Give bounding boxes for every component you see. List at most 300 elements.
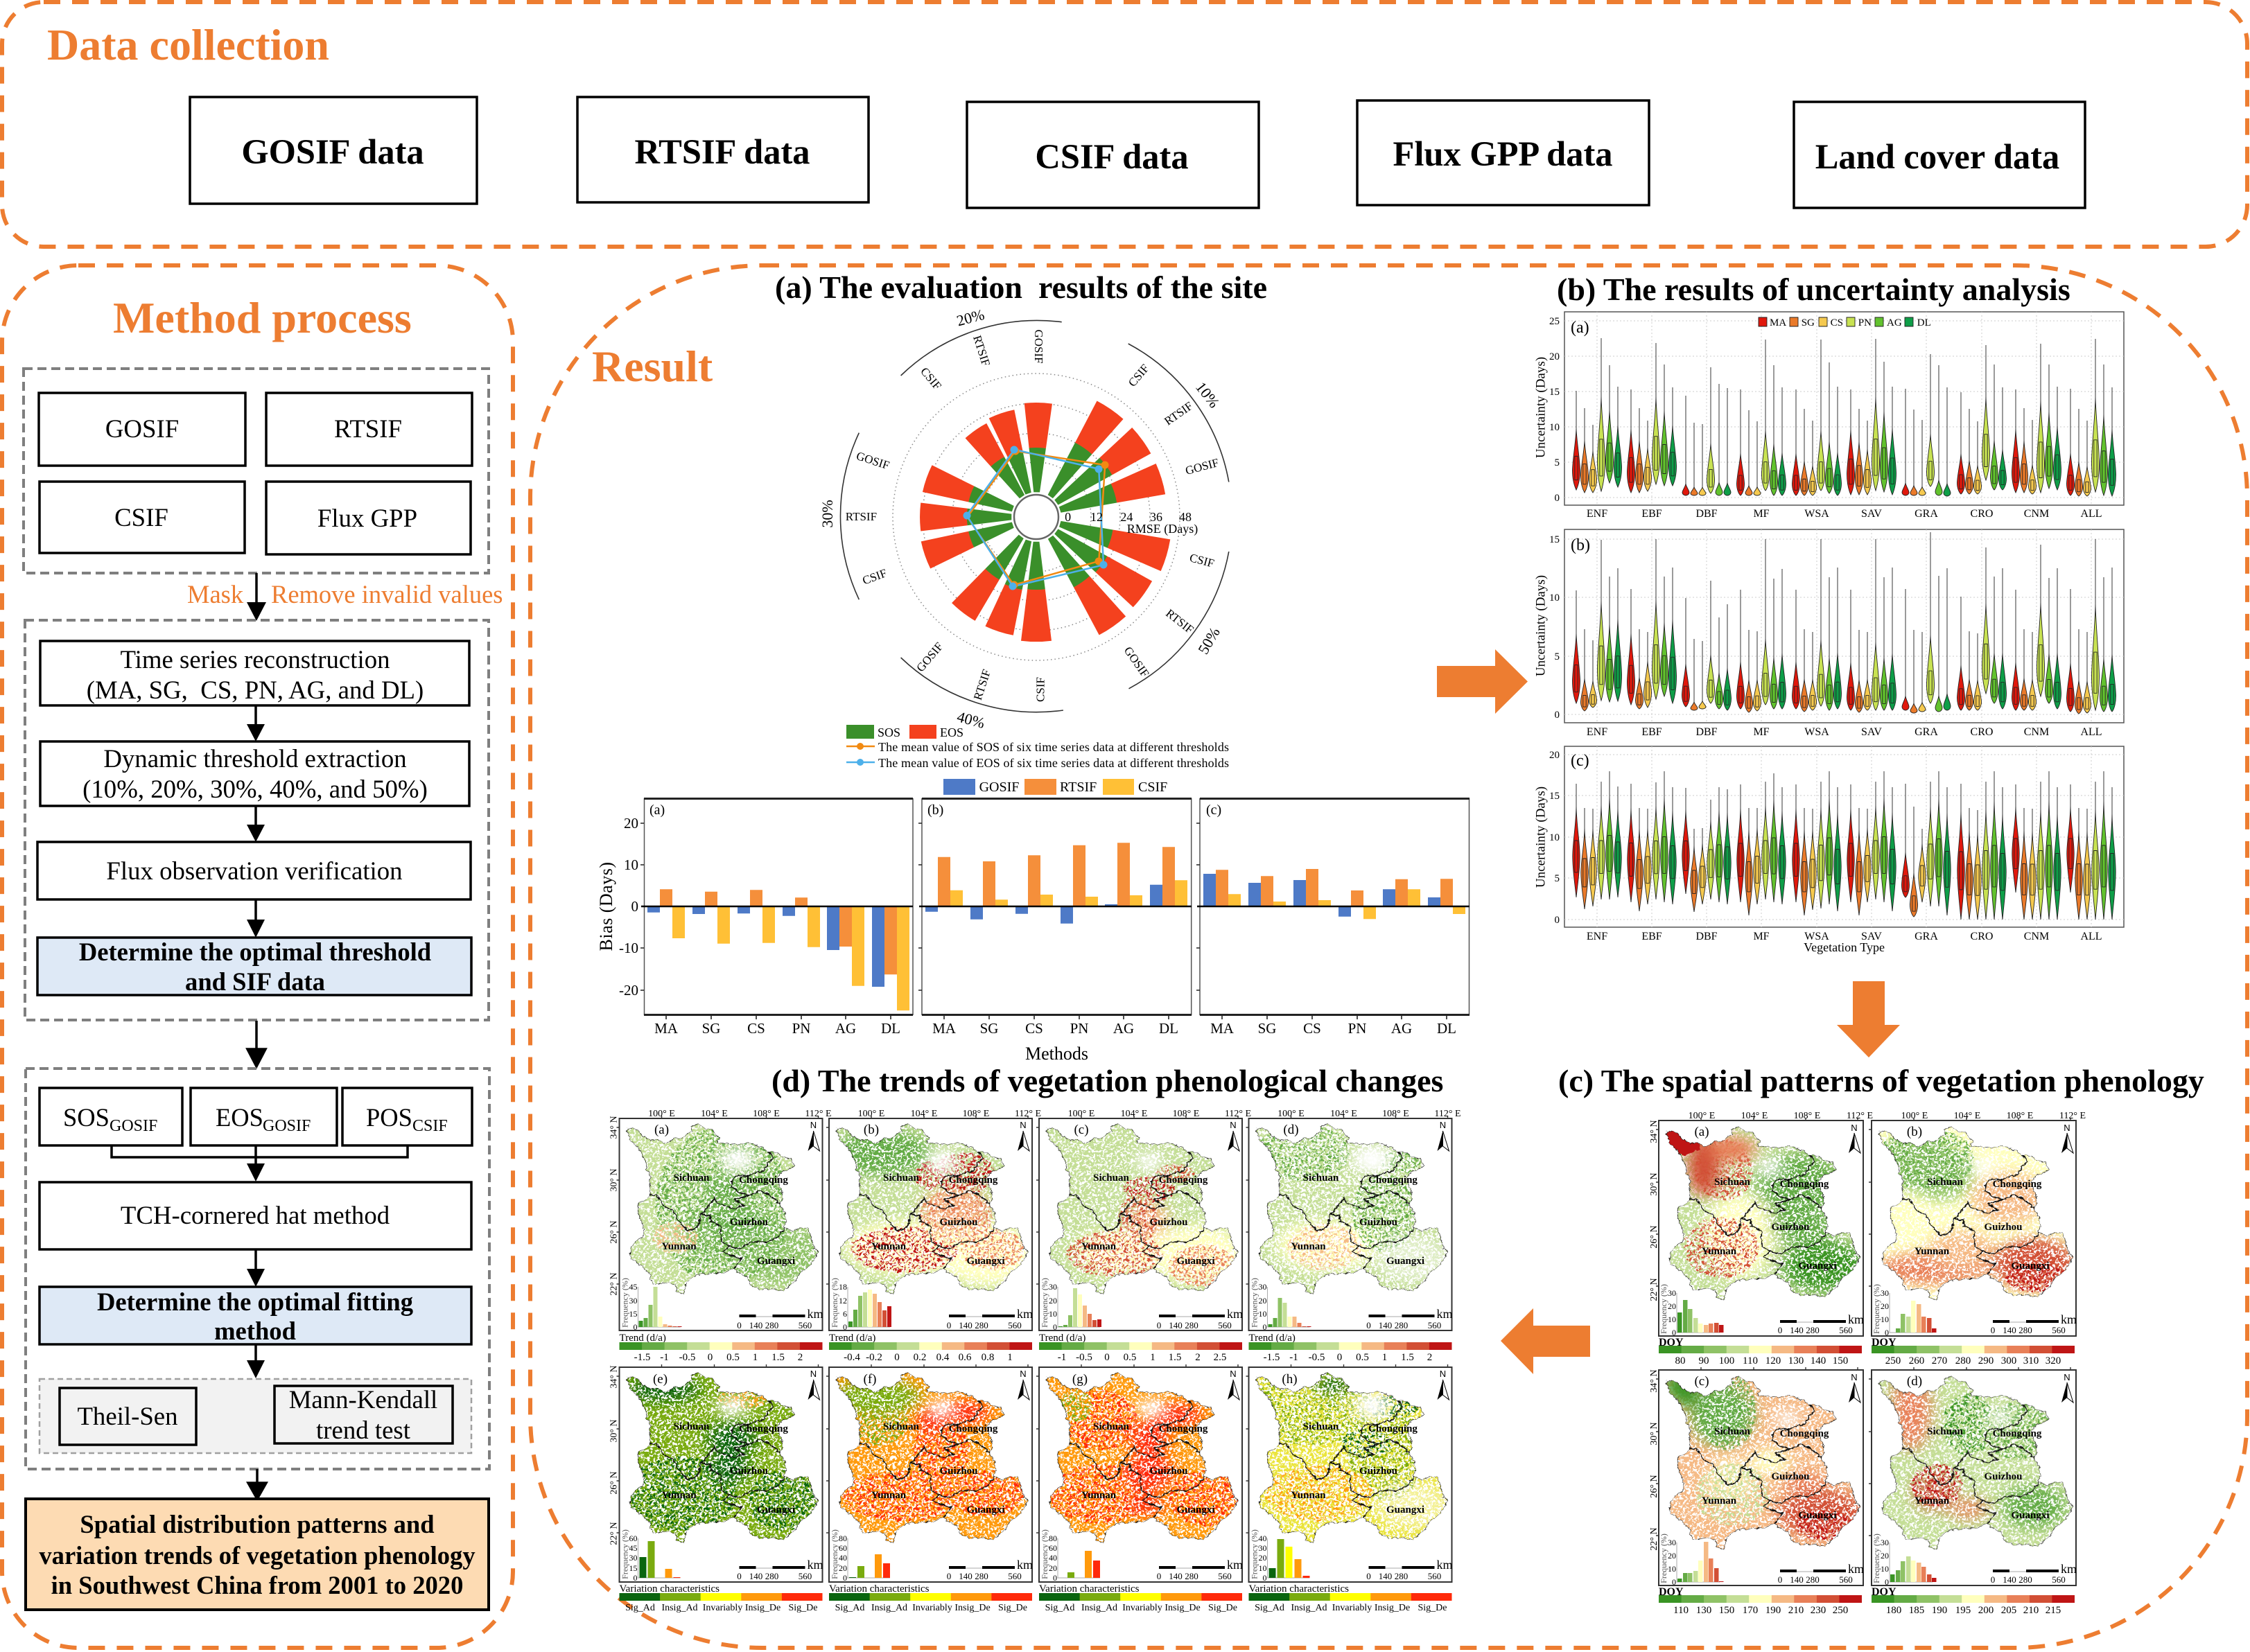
map panel: spatial EOS (b): 280 — [1955, 1355, 1971, 1367]
chart: polar RMSE: 12 — [1090, 510, 1103, 524]
map panel: spatial EOS (b): 300 — [2001, 1355, 2016, 1367]
map panel: trend (d): 30 — [1259, 1282, 1267, 1292]
map panel: trend (c): 140 — [1169, 1320, 1183, 1330]
map panel: trend (a): 0 — [708, 1352, 713, 1363]
map panel: variation (h): 10 — [1259, 1563, 1267, 1573]
map panel: spatial EOS (b): 108° E — [2007, 1111, 2033, 1121]
heading: spatial patterns: (c) The spatial patterns of vegetation phenology — [1558, 1063, 2204, 1098]
group: fitting steps: trend test — [316, 1416, 410, 1444]
map panel: trend (a): 112° E — [805, 1109, 832, 1119]
map panel: variation (g): (g) — [1072, 1372, 1088, 1387]
map panel: trend (a): 30 — [629, 1296, 638, 1306]
map panel: trend (d): 0 — [1337, 1352, 1342, 1363]
map panel: variation (e): 60 — [629, 1534, 638, 1543]
map panel: spatial SOS (a) — [1649, 1111, 1873, 1367]
bar chart: bias: DL — [1437, 1020, 1456, 1037]
map panel: variation (h): Sig_De — [1418, 1603, 1447, 1613]
map panel: trend (c): 560 — [1218, 1320, 1232, 1330]
map panel: spatial SOS (a): km — [1848, 1312, 1864, 1326]
map panel: variation (h): Guizhou — [1359, 1466, 1397, 1477]
map panel: variation (g): Invariably — [1122, 1603, 1162, 1613]
map panel: trend (d): 140 — [1379, 1320, 1392, 1330]
map panel: variation (f): Frequency (%) — [830, 1529, 839, 1579]
group: fitting steps — [26, 1069, 489, 1469]
map panel: spatial EOS (b): 270 — [1932, 1355, 1947, 1367]
map panel: variation (g): Chongqing — [1159, 1423, 1208, 1434]
map panel: spatial SOS (a): 34° N — [1649, 1120, 1659, 1143]
bar chart: bias: CS — [747, 1020, 765, 1037]
map panel: trend (a): 560 — [799, 1320, 812, 1330]
map panel: trend (c): km — [1227, 1307, 1243, 1321]
chart: uncertainty violin (c): 0 — [1554, 915, 1560, 926]
map panel: variation (f): 20 — [839, 1563, 847, 1573]
map panel: variation (f): Chongqing — [949, 1423, 998, 1434]
map panel: trend (a): 30° N — [609, 1168, 619, 1192]
map panel: spatial SOS (a): Guizhou — [1771, 1222, 1810, 1233]
map panel: spatial length (d): 180 — [1886, 1605, 1901, 1616]
arrow: left to trends — [1501, 1308, 1590, 1374]
chart: uncertainty violin (a): EBF — [1641, 508, 1662, 520]
map panel: trend (a): 1 — [753, 1352, 758, 1363]
map panel: spatial POS (c): Guangxi — [1798, 1510, 1837, 1521]
map panel: trend (b): 280 — [975, 1320, 988, 1330]
map panel: variation (f): Insig_Ad — [871, 1603, 907, 1613]
map panel: variation (e): Sichuan — [674, 1421, 710, 1432]
chart: polar RMSE: 30% — [819, 500, 836, 528]
chart: uncertainty violin (b): ENF — [1587, 726, 1607, 738]
map panel: variation (f): Insig_De — [954, 1603, 991, 1613]
legend: violin methods: DL — [1917, 317, 1931, 328]
map panel: spatial POS (c): 22° N — [1649, 1527, 1659, 1551]
box: final output: variation trends of vegetation phenology — [39, 1541, 476, 1570]
map panel: variation (h): 30 — [1259, 1543, 1267, 1553]
map panel: variation (g): km — [1227, 1558, 1243, 1572]
map panel: trend (b): Guizhou — [939, 1217, 978, 1228]
map panel: trend (b): 0 — [894, 1352, 900, 1363]
map panel: spatial POS (c): 130 — [1696, 1605, 1711, 1616]
chart: uncertainty violin (a): 20 — [1549, 351, 1560, 362]
group: threshold steps: Time series reconstruction — [120, 645, 390, 674]
map panel: trend (d): Guizhou — [1359, 1217, 1397, 1228]
map panel: trend (a) — [609, 1109, 832, 1363]
chart: uncertainty violin (a): WSA — [1804, 508, 1829, 520]
chart: polar RMSE: CSIF — [1034, 677, 1047, 702]
chart: uncertainty violin (c): EBF — [1641, 931, 1662, 942]
chart: polar RMSE: 0 — [1065, 510, 1071, 524]
map panel: trend (d): 1 — [1382, 1352, 1387, 1363]
map panel: variation (h): 0 — [1366, 1571, 1371, 1581]
map panel: trend (b): Frequency (%) — [830, 1278, 839, 1328]
map panel: spatial EOS (b): Sichuan — [1927, 1177, 1964, 1188]
map panel: variation (g) — [1036, 1364, 1243, 1613]
chart: uncertainty violin (a): CRO — [1971, 508, 1993, 520]
map panel: spatial SOS (a): 112° E — [1847, 1111, 1873, 1121]
chart: uncertainty violin (b) — [1533, 529, 2124, 738]
group: threshold steps: (MA, SG, CS, PN, AG, and DL) — [87, 676, 424, 704]
chart: uncertainty violin (b): MF — [1753, 726, 1770, 738]
group: fitting steps: Theil-Sen — [77, 1402, 178, 1430]
legend: polar chart: SOS — [878, 726, 900, 739]
chart: uncertainty violin (c): Uncertainty (Days) — [1533, 787, 1548, 888]
map panel: spatial SOS (a): Frequency (%) — [1659, 1284, 1668, 1334]
map panel: spatial SOS (a): 100 — [1719, 1355, 1734, 1367]
chart: polar RMSE: GOSIF — [1122, 644, 1152, 680]
map panel: trend (d): -1 — [1289, 1352, 1298, 1363]
map panel: spatial POS (c): DOY — [1659, 1586, 1684, 1598]
legend: polar chart: The mean value of EOS of six time series data at different thresholds — [878, 756, 1229, 770]
chart: uncertainty violin (b): ALL — [2080, 726, 2102, 738]
map panel: trend (a): 100° E — [648, 1109, 675, 1119]
map panel: spatial EOS (b): 112° E — [2059, 1111, 2086, 1121]
map panel: variation (h): Sichuan — [1303, 1421, 1339, 1432]
chart: uncertainty violin (b): Uncertainty (Days) — [1533, 575, 1548, 676]
map panel: variation (f): Yunnan — [871, 1490, 907, 1501]
chart: uncertainty violin (a): 5 — [1554, 457, 1560, 468]
map panel: spatial POS (c): 150 — [1719, 1605, 1734, 1616]
map panel: trend (d): 100° E — [1277, 1109, 1305, 1119]
map panel: spatial POS (c): 210 — [1788, 1605, 1804, 1616]
map panel: spatial EOS (b): 0 — [1991, 1325, 1995, 1335]
chart: uncertainty violin (b): WSA — [1804, 726, 1829, 738]
chart: uncertainty violin (c): Vegetation Type — [1804, 940, 1885, 954]
map panel: trend (d): 108° E — [1382, 1109, 1409, 1119]
map panel: trend (b): 0 — [947, 1320, 951, 1330]
map panel: spatial SOS (a): 90 — [1698, 1355, 1709, 1367]
map panel: variation (f): km — [1017, 1558, 1033, 1572]
legend: bias chart: RTSIF — [1060, 780, 1097, 795]
map panel: variation (e): 45 — [629, 1543, 638, 1553]
map panel: spatial length (d): 205 — [2001, 1605, 2016, 1616]
group: fitting steps: Mann-Kendall — [289, 1385, 437, 1414]
box: GOSIF data: GOSIF data — [241, 132, 424, 171]
group: input datasets: RTSIF — [334, 414, 402, 443]
map panel: trend (a): 0 — [737, 1320, 742, 1330]
map panel: spatial EOS (b): 0 — [1885, 1328, 1889, 1337]
map panel: trend (c): 112° E — [1225, 1109, 1251, 1119]
map panel: trend (d): km — [1436, 1307, 1453, 1321]
chart: uncertainty violin (b): CRO — [1971, 726, 1993, 738]
chart: polar RMSE: 50% — [1194, 624, 1223, 657]
map panel: spatial POS (c): 190 — [1765, 1605, 1781, 1616]
map panel: variation (h): km — [1436, 1558, 1453, 1572]
group: threshold steps: (10%, 20%, 30%, 40%, and 50%) — [82, 775, 428, 803]
map panel: spatial length (d): 20 — [1881, 1551, 1889, 1561]
bar chart: bias: DL — [1159, 1020, 1178, 1037]
map panel: spatial POS (c): Chongqing — [1780, 1428, 1829, 1439]
map panel: trend (c): Sichuan — [1093, 1172, 1130, 1184]
bar chart: bias: SG — [980, 1020, 998, 1037]
map panel: variation (h): Invariably — [1332, 1603, 1372, 1613]
map panel: trend (b): 0.2 — [914, 1352, 926, 1363]
map panel: trend (b): 6 — [843, 1309, 847, 1319]
group: input datasets: CSIF — [114, 503, 168, 531]
map panel: variation (f): Sichuan — [883, 1421, 920, 1432]
map panel: trend (a): 26° N — [609, 1220, 619, 1244]
bar chart: bias: AG — [835, 1020, 856, 1037]
map panel: spatial length (d) — [1869, 1367, 2077, 1616]
map panel: spatial EOS (b): 560 — [2052, 1325, 2066, 1335]
map panel: spatial SOS (a): 120 — [1765, 1355, 1781, 1367]
panel: data collection — [2, 2, 2247, 247]
map panel: trend (b): 12 — [839, 1296, 847, 1306]
map panel: variation (g): Variation characteristics — [1039, 1583, 1140, 1594]
chart: uncertainty violin (c): MF — [1753, 931, 1770, 942]
chart: uncertainty violin (b): 5 — [1554, 651, 1560, 662]
box: Land cover data — [1794, 102, 2085, 208]
map panel: trend (c): Guizhou — [1149, 1217, 1188, 1228]
map panel: trend (d): 560 — [1428, 1320, 1441, 1330]
bar chart: bias: PN — [1348, 1020, 1366, 1037]
arrow: to uncertainty — [1437, 649, 1528, 714]
map panel: spatial POS (c): 0 — [1778, 1574, 1782, 1585]
map panel: trend (b): 18 — [839, 1282, 847, 1292]
bar chart: bias: CS — [1025, 1020, 1043, 1037]
map panel: spatial POS (c): 30° N — [1649, 1422, 1659, 1446]
map panel: spatial EOS (b): km — [2061, 1312, 2077, 1326]
map panel: variation (e): 15 — [629, 1563, 638, 1573]
map panel: spatial POS (c): Sichuan — [1714, 1426, 1751, 1437]
map panel: spatial length (d): 215 — [2046, 1605, 2061, 1616]
heading: method process: Method process — [113, 293, 412, 342]
bar chart: bias: SG — [702, 1020, 720, 1037]
chart: uncertainty violin (c) — [1533, 746, 2124, 954]
map panel: variation (e): km — [807, 1558, 823, 1572]
map panel: spatial EOS (b): 100° E — [1901, 1111, 1928, 1121]
map panel: variation (f): 280 — [975, 1571, 988, 1581]
map panel: variation (e): N — [810, 1369, 817, 1379]
map panel: trend (d): 0 — [1366, 1320, 1371, 1330]
map panel: spatial SOS (a): (a) — [1694, 1125, 1709, 1139]
map panel: spatial POS (c): (c) — [1694, 1374, 1709, 1389]
map panel: variation (g): N — [1230, 1369, 1237, 1379]
chart: polar RMSE: GOSIF — [855, 449, 891, 472]
map panel: variation (f): Sig_Ad — [835, 1603, 864, 1613]
chart: uncertainty violin (a): GRA — [1915, 508, 1938, 520]
map panel: trend (c): 2.5 — [1214, 1352, 1226, 1363]
bar chart: bias: AG — [1391, 1020, 1412, 1037]
bar chart: bias: 0 — [631, 898, 638, 915]
map panel: variation (f): 80 — [839, 1534, 847, 1543]
map panel: spatial length (d): 200 — [1978, 1605, 1994, 1616]
map panel: trend (d): 10 — [1259, 1309, 1267, 1319]
chart: uncertainty violin (b): 15 — [1549, 534, 1560, 545]
map panel: trend (d): -0.5 — [1309, 1352, 1325, 1363]
map panel: variation (e): (e) — [653, 1372, 668, 1387]
map panel: variation (f): 0 — [947, 1571, 951, 1581]
map panel: trend (d): 1.5 — [1401, 1352, 1414, 1363]
map panel: spatial EOS (b): 104° E — [1954, 1111, 1980, 1121]
chart: polar RMSE: RTSIF — [846, 510, 877, 523]
map panel: spatial SOS (a): 22° N — [1649, 1278, 1659, 1301]
bar chart: bias: Bias (Days) — [596, 862, 616, 951]
bar chart: bias: PN — [792, 1020, 810, 1037]
bar chart: bias — [596, 798, 1470, 1064]
map panel: spatial SOS (a): DOY — [1659, 1337, 1684, 1348]
box: CSIF data — [967, 102, 1259, 208]
map panel: trend (c): 0 — [1104, 1352, 1110, 1363]
map panel: spatial EOS (b) — [1869, 1111, 2086, 1367]
group: fitting steps: method — [214, 1317, 296, 1345]
bar chart: bias: 10 — [624, 856, 638, 873]
map panel: trend (a): Trend (d/a) — [620, 1333, 666, 1344]
map panel: spatial length (d): Yunnan — [1915, 1495, 1950, 1506]
panel: result frame — [530, 265, 2247, 1648]
chart: uncertainty violin (b): CNM — [2024, 726, 2049, 738]
map panel: spatial SOS (a): 30° N — [1649, 1172, 1659, 1196]
map panel: spatial length (d): 10 — [1881, 1564, 1889, 1574]
map panel: trend (c): 0.5 — [1124, 1352, 1136, 1363]
map panel: variation (g): 60 — [1049, 1543, 1057, 1553]
map panel: trend (d): -1.5 — [1264, 1352, 1280, 1363]
chart: polar RMSE: RMSE (Days) — [1127, 522, 1198, 536]
map panel: variation (e): 34° N — [609, 1365, 619, 1389]
chart: polar RMSE: CSIF — [861, 566, 889, 587]
map panel: variation (f): Invariably — [912, 1603, 952, 1613]
map panel: trend (b): Sichuan — [883, 1172, 920, 1184]
map panel: variation (f) — [826, 1364, 1033, 1613]
map panel: variation (g): 280 — [1185, 1571, 1198, 1581]
map panel: trend (b): 0.6 — [959, 1352, 972, 1363]
map panel: trend (a): Guizhou — [730, 1217, 768, 1228]
bar chart: bias: MA — [932, 1020, 957, 1037]
map panel: spatial SOS (a): 140 — [1790, 1325, 1804, 1335]
arrow — [248, 1469, 266, 1499]
chart: uncertainty violin (b): (b) — [1571, 536, 1590, 554]
map panel: trend (d): 2 — [1427, 1352, 1432, 1363]
map panel: trend (c): 20 — [1049, 1296, 1057, 1306]
map panel: trend (b): Yunnan — [871, 1241, 907, 1252]
map panel: spatial length (d): Guangxi — [2011, 1510, 2050, 1521]
box: Flux GPP data: Flux GPP data — [1393, 134, 1613, 173]
chart: uncertainty violin (c): 15 — [1549, 791, 1560, 802]
map panel: variation (g): Insig_De — [1165, 1603, 1201, 1613]
chart: polar RMSE: 10% — [1192, 378, 1223, 411]
map panel: spatial SOS (a): Guangxi — [1798, 1260, 1837, 1272]
bar chart: bias: -10 — [619, 940, 638, 956]
map panel: spatial SOS (a): 0 — [1672, 1328, 1676, 1337]
map panel: trend (d): Guangxi — [1386, 1256, 1424, 1267]
bar chart: bias: (c) — [1206, 802, 1221, 818]
map panel: trend (a): 0.5 — [726, 1352, 740, 1363]
chart: uncertainty violin (c): (c) — [1571, 752, 1589, 770]
map panel: trend (a): N — [810, 1120, 817, 1130]
chart: polar RMSE: 48 — [1179, 510, 1192, 524]
map panel: variation (f): Guangxi — [966, 1504, 1005, 1515]
map panel: variation (g): Guizhou — [1149, 1466, 1188, 1477]
box: CSIF data: CSIF data — [1035, 137, 1189, 176]
map panel: spatial EOS (b): N — [2064, 1123, 2070, 1133]
chart: polar RMSE: RTSIF — [970, 334, 993, 368]
map panel: trend (a): Chongqing — [739, 1175, 788, 1186]
map panel: spatial EOS (b): 140 — [2003, 1325, 2016, 1335]
map panel: trend (d): 20 — [1259, 1296, 1267, 1306]
chart: uncertainty violin (c): ENF — [1587, 931, 1607, 942]
map panel: trend (b): (b) — [864, 1123, 879, 1137]
map panel: trend (b): 0.8 — [982, 1352, 994, 1363]
map panel: variation (h): Frequency (%) — [1250, 1529, 1259, 1579]
chart: polar RMSE: 24 — [1120, 510, 1133, 524]
map panel: spatial SOS (a): 140 — [1811, 1355, 1826, 1367]
map panel: spatial SOS (a): 110 — [1743, 1355, 1758, 1367]
group: threshold steps: and SIF data — [185, 967, 325, 996]
map panel: variation (g): 0 — [1053, 1573, 1057, 1583]
chart: polar RMSE — [819, 306, 1229, 732]
map panel: spatial length (d): N — [2064, 1372, 2070, 1382]
map panel: trend (d): 0 — [1263, 1322, 1267, 1332]
map panel: trend (c): Yunnan — [1081, 1241, 1117, 1252]
map panel: spatial SOS (a): 130 — [1788, 1355, 1804, 1367]
map panel: variation (e): 140 — [749, 1571, 762, 1581]
map panel: variation (e): Guangxi — [757, 1504, 795, 1515]
map panel: spatial POS (c): 230 — [1811, 1605, 1826, 1616]
chart: polar RMSE: 36 — [1150, 510, 1162, 524]
chart: uncertainty violin (c): 5 — [1554, 873, 1560, 884]
chart: uncertainty violin (a): MF — [1753, 508, 1770, 520]
chart: uncertainty violin (b): EBF — [1641, 726, 1662, 738]
map panel: trend (b): -0.2 — [866, 1352, 882, 1363]
map panel: trend (b): km — [1017, 1307, 1033, 1321]
bar chart: bias: DL — [881, 1020, 900, 1037]
map panel: trend (b): 104° E — [911, 1109, 937, 1119]
map panel: variation (e): 30° N — [609, 1419, 619, 1443]
map panel: spatial length (d): Chongqing — [1993, 1428, 2042, 1439]
map panel: spatial SOS (a): N — [1851, 1123, 1858, 1133]
map panel: variation (e): Invariably — [703, 1603, 742, 1613]
map panel: spatial POS (c): 140 — [1790, 1574, 1804, 1585]
box: RTSIF data: RTSIF data — [634, 132, 810, 171]
map panel: variation (e): 26° N — [609, 1471, 619, 1495]
box: final output: in Southwest China from 2001 to 2020 — [51, 1571, 463, 1599]
map panel: trend (c): 10 — [1049, 1309, 1057, 1319]
box: final output — [26, 1499, 489, 1610]
group: input datasets — [24, 369, 489, 573]
map panel: spatial EOS (b): 280 — [2018, 1325, 2032, 1335]
map panel: trend (b): 140 — [959, 1320, 973, 1330]
map panel: spatial POS (c): N — [1851, 1372, 1858, 1382]
map panel: spatial POS (c): 110 — [1673, 1605, 1689, 1616]
map panel: variation (f): 140 — [959, 1571, 973, 1581]
bar chart: bias: PN — [1070, 1020, 1088, 1037]
box: Flux GPP data — [1357, 100, 1649, 205]
map panel: spatial POS (c): Guizhou — [1771, 1471, 1810, 1482]
chart: polar RMSE: GOSIF — [914, 640, 945, 674]
group: fitting steps: CSIF — [412, 1117, 448, 1135]
arrow — [247, 1021, 265, 1066]
box: GOSIF data — [190, 97, 477, 204]
map panel: spatial EOS (b): 320 — [2046, 1355, 2061, 1367]
map panel: trend (a): -1 — [660, 1352, 669, 1363]
map panel: spatial length (d): Guizhou — [1984, 1471, 2023, 1482]
arrow with mask and remove invalid values labels: Remove invalid values — [271, 580, 503, 608]
map panel: spatial POS (c): 10 — [1668, 1564, 1676, 1574]
map panel: trend (d) — [1246, 1109, 1461, 1363]
map panel: spatial SOS (a): Yunnan — [1702, 1246, 1737, 1257]
map panel: variation (g): 20 — [1049, 1563, 1057, 1573]
map panel: trend (d): 104° E — [1330, 1109, 1357, 1119]
map panel: trend (c) — [1036, 1109, 1251, 1363]
chart: uncertainty violin (a): ENF — [1587, 508, 1607, 520]
group: fitting steps: GOSIF — [110, 1117, 157, 1135]
map panel: variation (e): 0 — [634, 1573, 638, 1583]
map panel: spatial POS (c): 30 — [1668, 1538, 1676, 1547]
heading: data collection: Data collection — [47, 20, 329, 69]
map panel: variation (f): 0 — [843, 1573, 847, 1583]
chart: uncertainty violin (b): DBF — [1695, 726, 1718, 738]
legend: violin methods: SG — [1802, 317, 1815, 328]
map panel: trend (a): 280 — [765, 1320, 778, 1330]
legend: bias chart — [943, 779, 1167, 795]
map panel: spatial SOS (a): 108° E — [1794, 1111, 1820, 1121]
